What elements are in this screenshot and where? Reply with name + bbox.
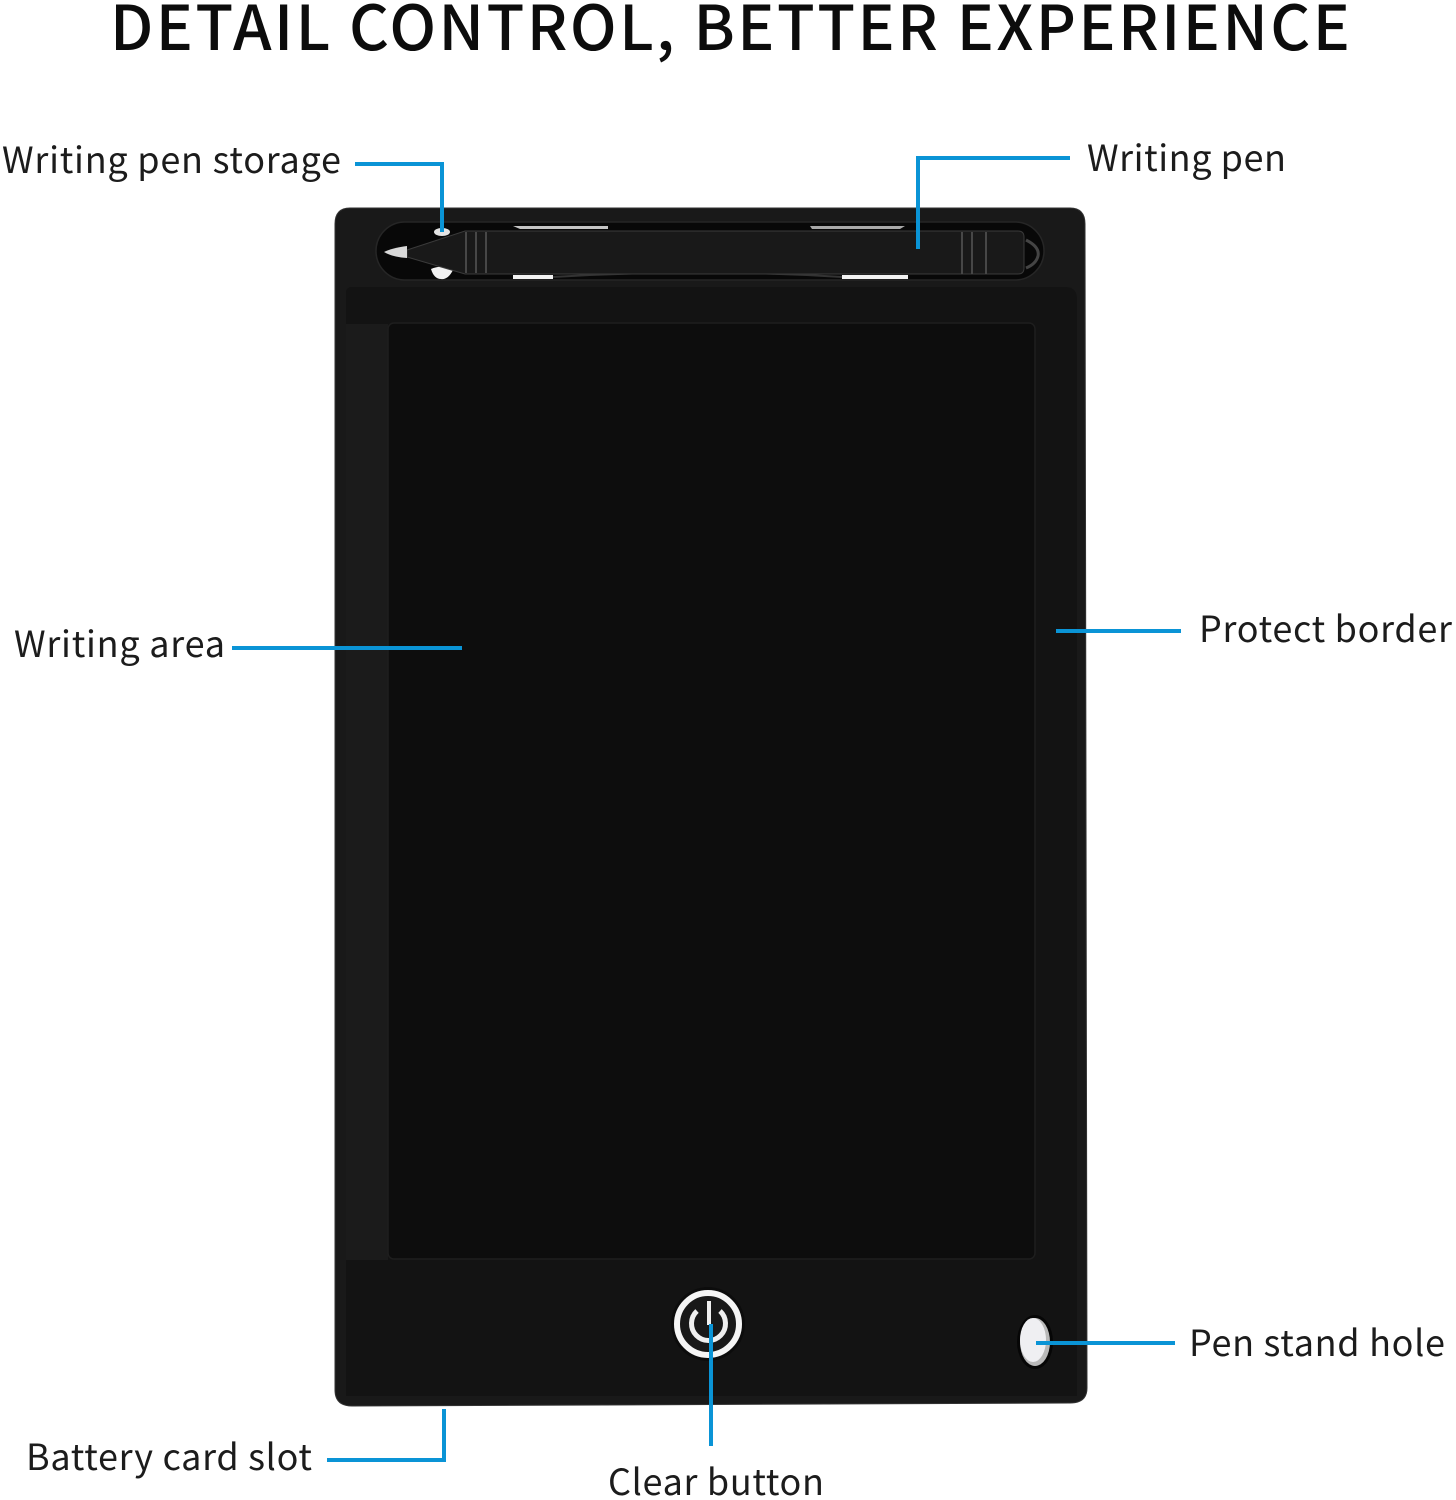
callout: writing pen storage: Writing pen storage bbox=[2, 132, 341, 184]
callout: writing pen storage bbox=[2, 132, 442, 232]
callout: protect border: Protect border bbox=[1199, 601, 1453, 653]
panel: writing tablet bbox=[335, 208, 1087, 1406]
callout: writing area: Writing area bbox=[14, 616, 225, 668]
writing area bbox=[388, 323, 1035, 1259]
callout: writing pen bbox=[918, 130, 1286, 249]
callout: battery card slot bbox=[26, 1409, 444, 1481]
protect border bbox=[346, 287, 1077, 1396]
writing pen bbox=[384, 231, 1038, 274]
icon: clear button power symbol bbox=[671, 1287, 745, 1361]
left textured border strip bbox=[346, 324, 388, 1260]
tablet body bbox=[335, 208, 1087, 1406]
storage clip highlights bbox=[431, 226, 908, 279]
icon: pen stand hole bbox=[1017, 1315, 1053, 1369]
callout: pen stand hole: Pen stand hole bbox=[1189, 1315, 1445, 1367]
pen storage groove bbox=[376, 222, 1044, 280]
callout: writing pen: Writing pen bbox=[1087, 130, 1286, 182]
callout: battery card slot: Battery card slot bbox=[26, 1429, 312, 1481]
